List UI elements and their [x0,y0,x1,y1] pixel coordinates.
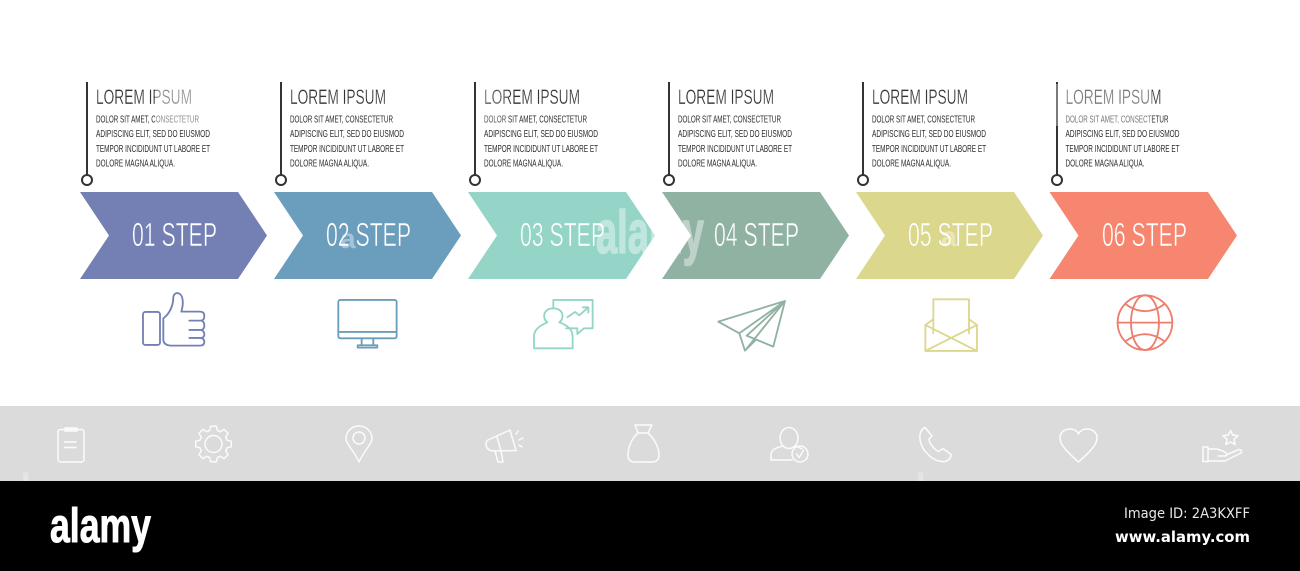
text block [484,114,598,170]
arrow [274,192,461,279]
heading: LOREM IPSUM [96,86,192,109]
heading: LOREM IPSUM [290,86,386,109]
step label: 01 STEP [132,216,217,253]
text block: ADIPISCING ELIT, SED DO EIUSMOD [484,129,598,140]
image id: Image ID: 2A3KXFF [1124,506,1250,522]
icon: thumbs up [143,293,204,346]
icon: gear [196,426,231,462]
icon: verified user [771,428,808,462]
text block: ADIPISCING ELIT, SED DO EIUSMOD [1066,129,1180,140]
website: www.alamy.com [1115,528,1250,546]
step label: 02 STEP [326,216,411,253]
text block: ADIPISCING ELIT, SED DO EIUSMOD [290,129,404,140]
watermark fades over text [155,84,1152,126]
step label: 04 STEP [714,216,799,253]
text block: DOLORE MAGNA ALIQUA. [96,158,175,170]
panel: step 6 [1050,82,1237,350]
watermark: small a on step 5: a [941,221,957,252]
watermark: small a on step 2: a [340,223,356,254]
connector pin [664,82,674,185]
icon: megaphone [486,430,523,462]
connector pin [470,82,480,185]
heading: LOREM IPSUM [484,86,580,109]
icon: open envelope [925,299,977,351]
text block: DOLORE MAGNA ALIQUA. [290,158,369,170]
watermark: band left: alamy [0,464,105,522]
text block: DOLOR SIT AMET, CONSECTETUR [484,114,587,126]
text block: DOLORE MAGNA ALIQUA. [1066,158,1144,170]
text block: DOLOR SIT AMET, CONSECTETUR [872,114,975,126]
heading: LOREM IPSUM [872,86,968,109]
heading: LOREM IPSUM [678,86,774,109]
text block [96,114,210,170]
icon: person with presentation bubble [534,300,593,348]
text block: DOLOR SIT AMET, CONSECTETUR [678,114,781,126]
step label: 03 STEP [520,216,605,253]
step label: 06 STEP [1102,216,1187,253]
icon: paper plane [718,301,785,351]
connector pin [82,82,92,185]
watermark: alamy centre: alamy [596,199,704,266]
arrow [1050,192,1237,279]
arrow [468,192,655,279]
text block: TEMPOR INCIDIDUNT UT LABORE ET [484,144,598,155]
text block [678,114,792,170]
panel: step 3 [468,82,655,348]
text block: DOLORE MAGNA ALIQUA. [872,158,951,170]
icon: map pin [346,426,372,462]
text block: DOLOR SIT AMET, CONSECTETUR [96,114,199,126]
connector pin [858,82,868,185]
text block [1066,114,1180,170]
text block: DOLOR SIT AMET, CONSECTETUR [290,114,393,126]
text block [872,114,986,170]
text block: TEMPOR INCIDIDUNT UT LABORE ET [1066,144,1180,155]
icon: hand with star [1203,430,1242,462]
panel: step 4 [662,82,849,351]
footer bar [0,481,1300,571]
text block: ADIPISCING ELIT, SED DO EIUSMOD [872,129,986,140]
text block: TEMPOR INCIDIDUNT UT LABORE ET [678,144,792,155]
heading: LOREM IPSUM [1066,86,1162,109]
text block: DOLOR SIT AMET, CONSECTETUR [1066,114,1168,126]
text block: ADIPISCING ELIT, SED DO EIUSMOD [678,129,792,140]
text block: DOLORE MAGNA ALIQUA. [484,158,563,170]
icon: clipboard [58,428,84,462]
arrow [80,192,267,279]
icon band [0,406,1300,522]
text block: TEMPOR INCIDIDUNT UT LABORE ET [290,144,404,155]
icon: globe [1118,295,1172,350]
text block: DOLORE MAGNA ALIQUA. [678,158,757,170]
icon: money sack [628,425,659,462]
icon: telephone [920,428,951,462]
icon: heart [1060,429,1097,462]
text block: ADIPISCING ELIT, SED DO EIUSMOD [96,129,210,140]
text block: TEMPOR INCIDIDUNT UT LABORE ET [96,144,210,155]
panel: step 5 [856,82,1043,351]
panel: step 2 [274,82,461,348]
logo: alamy: alamy [50,500,151,553]
panel: step 1 [80,82,267,346]
connector pin [1052,82,1062,185]
text block [290,114,404,170]
step label: 05 STEP [908,216,993,253]
arrow [856,192,1043,279]
text block: TEMPOR INCIDIDUNT UT LABORE ET [872,144,986,155]
icon: desktop monitor [338,300,397,348]
connector pin [276,82,286,185]
arrow [662,192,849,279]
watermark: band right: alamy [895,464,1000,522]
